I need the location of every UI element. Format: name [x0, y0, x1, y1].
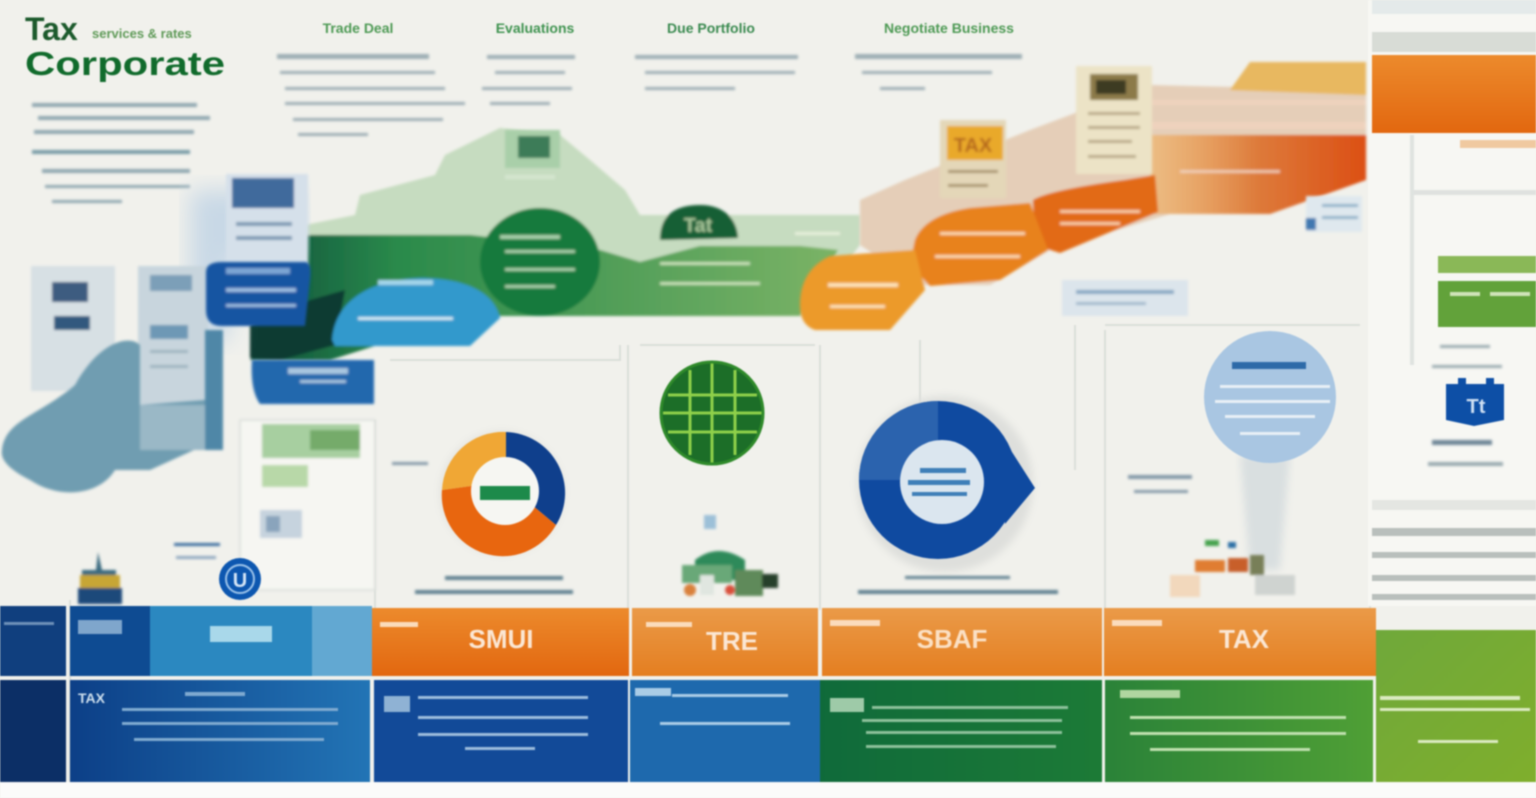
blue arch: [332, 278, 500, 346]
tax note yellow: TAX: [954, 135, 993, 157]
right panel orange banner: [1372, 55, 1536, 133]
title: services & rates: [92, 26, 192, 41]
orange header row: [372, 608, 1376, 676]
donut chart: orange: [440, 431, 565, 556]
right panel stripes: [1372, 500, 1536, 600]
icon: right document badge: Tt: [1467, 396, 1486, 418]
bottom row cells: [0, 680, 1530, 782]
green dome: [480, 208, 600, 316]
green info card: [240, 420, 375, 590]
orange header row: TAX: [1219, 624, 1270, 654]
blue cell: [70, 680, 370, 782]
orange header row: SMUI: [468, 624, 534, 654]
orange step 2: [910, 203, 1048, 286]
orange step 3: [1033, 175, 1158, 253]
orange stairs ribbon: [800, 62, 1366, 330]
donut label: [480, 486, 530, 500]
side notes: [392, 462, 1192, 493]
intro text: [32, 103, 210, 203]
green cell: [820, 680, 1102, 782]
small blue pill: [252, 360, 374, 404]
small blue note: [1306, 196, 1362, 232]
light green cell: [1105, 680, 1373, 782]
captions: [415, 576, 1058, 594]
card 3: [226, 174, 308, 266]
corner text: [1380, 696, 1530, 743]
orange header row: SBAF: [917, 624, 987, 654]
heading body text: [277, 54, 1022, 136]
column headings: Due Portfolio: [667, 20, 755, 36]
navy cell: [374, 680, 628, 782]
tax note yellow: [940, 120, 1006, 198]
orange header row: TRE: [706, 626, 758, 656]
footer: [0, 782, 1536, 798]
green ribbon and mountain: [250, 128, 860, 360]
green corner panel: [1376, 630, 1536, 782]
city icon: [1170, 540, 1295, 597]
green ribbon and mountain: Tat: [684, 215, 713, 237]
mid blue cell: [630, 680, 820, 782]
teal blob: [2, 330, 223, 492]
document on green hill: [505, 130, 560, 179]
title: Tax: [25, 11, 78, 47]
market stall icon: [682, 515, 778, 596]
left stacked document cards: [2, 174, 374, 492]
right panel text: [1428, 345, 1503, 466]
icon: right document badge: [1446, 378, 1504, 426]
icon: blue badge: [219, 558, 261, 600]
orange band: [1150, 135, 1366, 214]
orange step 1: [800, 250, 925, 330]
card 2: [138, 266, 208, 416]
column headings: [323, 20, 1014, 36]
column headings: Evaluations: [496, 20, 574, 36]
column headings: Negotiate Business: [884, 20, 1014, 36]
right panel green block: [1438, 256, 1536, 327]
card 1: [31, 266, 115, 391]
donut chart: blue: [857, 396, 1035, 572]
title: Corporate: [25, 45, 225, 82]
mid green dome: [660, 205, 738, 240]
pale label box: [1062, 280, 1188, 316]
title: [25, 11, 225, 82]
icon: green globe: [661, 362, 763, 465]
column headings: Trade Deal: [323, 20, 393, 36]
small ship icon: [78, 552, 122, 604]
blue cell: TAX: [78, 690, 106, 706]
blue donut label: [908, 468, 970, 496]
blue label box: [206, 262, 310, 326]
blue header row: [0, 606, 372, 676]
tax note cream: [1076, 66, 1152, 174]
icon: blue badge: U: [233, 570, 247, 592]
right-hand panel: [1368, 0, 1536, 606]
label and blue badge: [174, 543, 220, 559]
pale blue circle: [1204, 331, 1336, 570]
